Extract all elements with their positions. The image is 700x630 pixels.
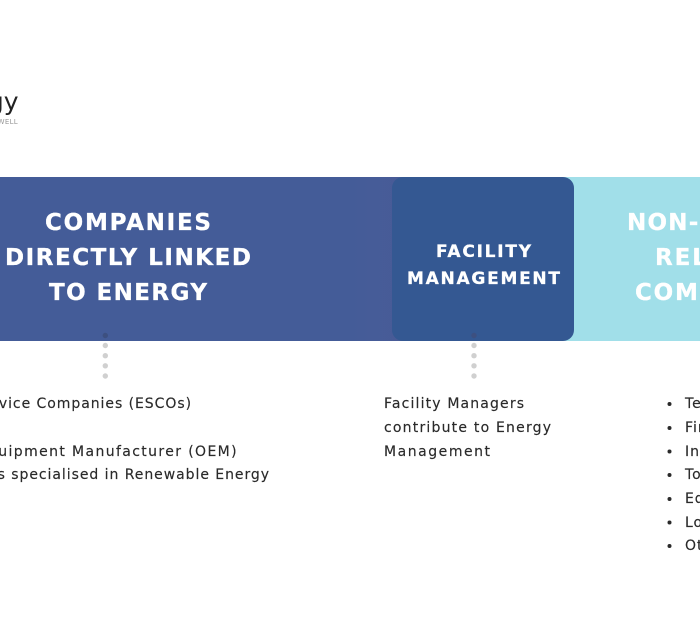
heading: companies directly linked to energy xyxy=(5,210,251,306)
heading: non-energy related companies xyxy=(627,210,700,306)
bullet list: non-energy sectors xyxy=(668,396,700,554)
dotted connector: companies directly linked xyxy=(103,333,108,379)
panel: non-energy related companies xyxy=(550,177,700,341)
heading: companies directly linked to energy: TO ENERGY xyxy=(49,280,207,306)
text block: facility managers: Facility Managers xyxy=(384,396,525,412)
text block: energy company types xyxy=(0,396,270,483)
text block: facility managers xyxy=(384,396,552,460)
panel: companies directly linked to energy xyxy=(0,177,410,341)
heading: companies directly linked to energy: DIRECTLY LINKED xyxy=(5,245,251,271)
panel: facility management xyxy=(392,177,574,341)
heading: facility management xyxy=(407,242,560,289)
dotted connector: facility management xyxy=(471,333,477,379)
text block: facility managers: contribute to Energy xyxy=(384,420,552,436)
heading: facility management: FACILITY xyxy=(436,242,532,262)
text block: facility managers: Management xyxy=(384,444,491,460)
heading: facility management: MANAGEMENT xyxy=(407,269,560,289)
heading: companies directly linked to energy: COMPANIES xyxy=(45,210,211,236)
